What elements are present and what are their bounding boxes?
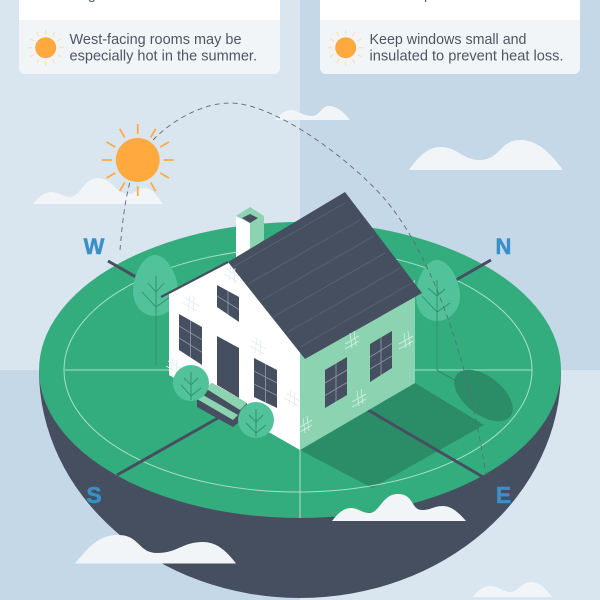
window: upper front [217,285,239,322]
panel: west-facing tip card [19,0,280,74]
cloud: bottom right [473,582,552,597]
cloud: behind sun [33,178,163,204]
cloud: bottom center [332,494,466,521]
compass label: E: E [496,482,511,508]
compass label: N: N [496,234,511,259]
cloud: bottom left [75,535,236,564]
brick marks: front wall [166,266,300,407]
tree: right [416,260,460,370]
window: lower left front [179,314,202,365]
ground base: dark hemisphere [39,370,561,598]
front wall [169,262,300,450]
compass label: S: S [86,482,102,508]
panel: north-facing tip card [320,0,580,74]
window: lower right front [254,358,277,408]
cloud: small upper middle [275,106,350,120]
icon: small sun, west card [28,30,64,66]
bush: right [238,402,274,438]
text: west-facing tip: especially hot in the summer. [70,48,257,64]
compass line: west [108,261,136,277]
brick marks: side wall [300,331,413,433]
compass ring and axes [64,248,532,518]
compass line: north [456,260,491,280]
front steps [197,383,247,427]
text: north-facing tip: Keep windows small and [370,31,526,48]
icon: large sun [102,124,174,196]
side wall [300,280,415,450]
ground top: green disc [39,222,561,518]
window: side far [370,331,392,382]
house shadow [300,383,484,488]
tree shadow [437,360,522,431]
house [161,192,422,450]
tree: left [133,255,178,365]
chimney [236,207,264,260]
text: west-facing tip: West-facing rooms may be [70,31,242,48]
roof [161,192,422,359]
sun path: dashed arc [120,103,486,475]
cloud: upper right [409,140,563,170]
compass line: south [117,418,218,475]
window: side near [325,357,347,408]
compass label: W: W [84,234,105,259]
compass line: east [368,410,483,477]
bush: left [173,365,209,401]
icon: small sun, north card [328,30,364,66]
door [217,336,239,398]
text: north-facing tip: insulated to prevent heat loss. [370,48,564,64]
